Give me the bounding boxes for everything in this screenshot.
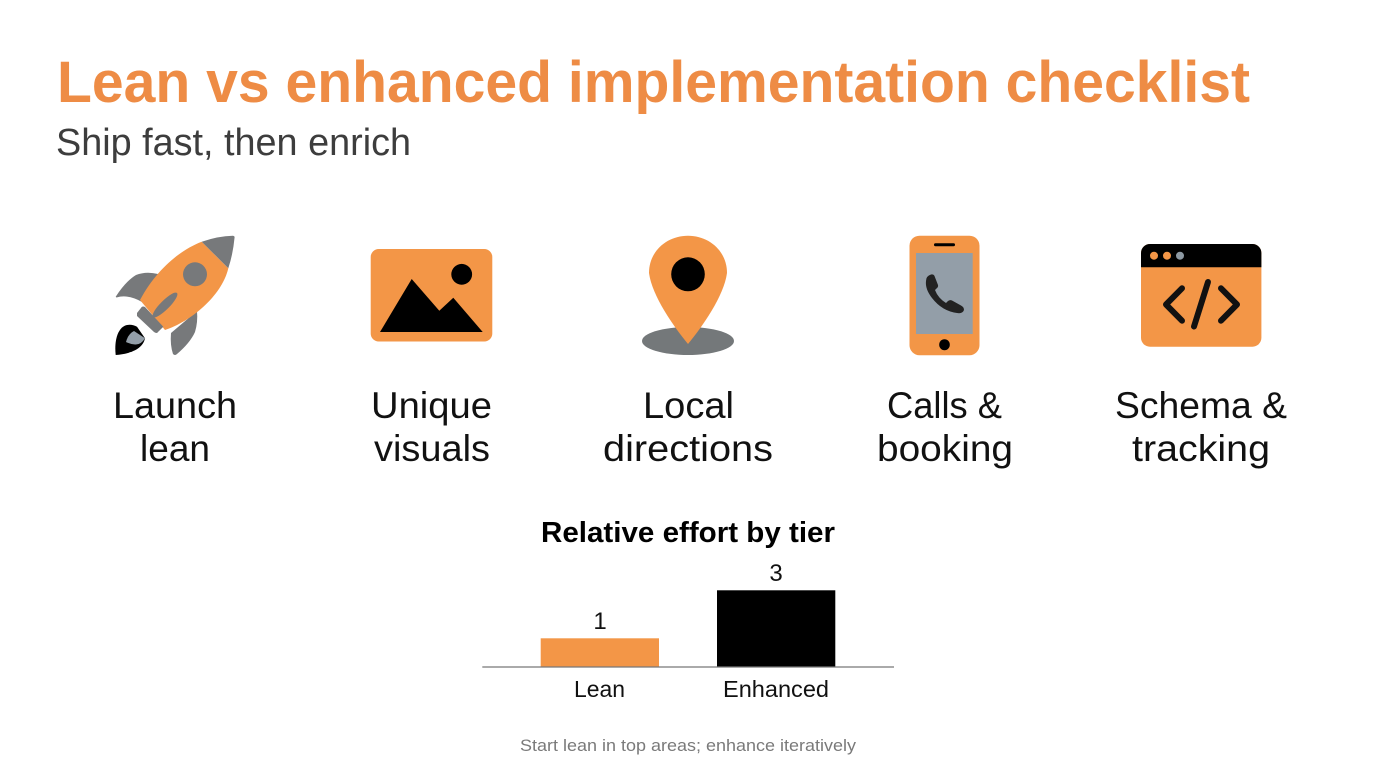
title: Lean vs enhanced implementation checklist — [57, 50, 1250, 115]
footnote: Start lean in top areas; enhance iteratively — [520, 736, 857, 755]
bar chart: relative effort by tier — [482, 517, 894, 702]
label: Calls & booking: Calls & — [887, 385, 1002, 426]
category label: Enhanced: Enhanced — [723, 676, 829, 702]
label: Unique visuals — [371, 385, 492, 469]
label: Local directions: directions — [603, 428, 773, 469]
label: Unique visuals: visuals — [374, 428, 490, 469]
label: Schema & tracking: Schema & — [1115, 385, 1287, 426]
label: Launch lean — [113, 385, 237, 469]
category label: Lean: Lean — [574, 676, 625, 702]
icon: map pin — [642, 236, 734, 355]
label: Local directions: Local — [643, 385, 734, 426]
bar: Enhanced — [717, 590, 835, 667]
value: Lean: 1 — [593, 608, 607, 635]
chart title: Relative effort by tier — [541, 517, 835, 549]
icon: code window — [1141, 244, 1261, 347]
label: Launch lean: lean — [140, 428, 210, 469]
label: Calls & booking: booking — [877, 428, 1013, 469]
bar: Lean — [541, 638, 659, 667]
label: Schema & tracking: tracking — [1132, 428, 1270, 469]
label: Local directions — [603, 385, 773, 469]
icon: rocket — [115, 236, 235, 355]
icon: image — [371, 249, 492, 342]
label: Unique visuals: Unique — [371, 385, 492, 426]
label: Launch lean: Launch — [113, 385, 237, 426]
icon: phone — [910, 236, 980, 355]
label: Schema & tracking — [1115, 385, 1287, 469]
value: Enhanced: 3 — [769, 560, 783, 587]
subtitle: Ship fast, then enrich — [56, 122, 411, 164]
label: Calls & booking — [877, 385, 1013, 469]
